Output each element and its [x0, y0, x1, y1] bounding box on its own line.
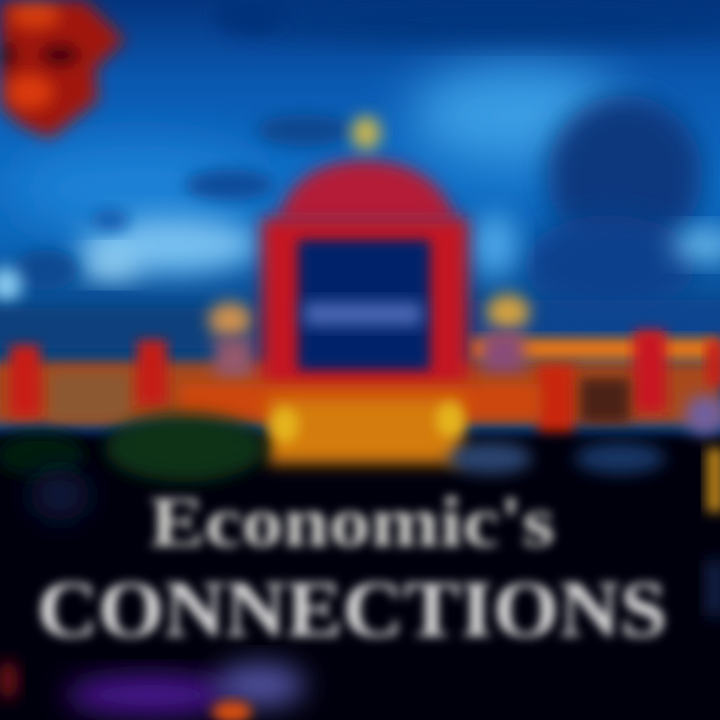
trees and foreground — [0, 395, 720, 616]
blue screen — [298, 240, 430, 370]
icon: golden finial — [351, 116, 381, 150]
dome — [278, 160, 456, 222]
sky background — [0, 0, 720, 400]
golden plinth — [180, 384, 540, 464]
central tower — [262, 116, 468, 386]
lower dark ground — [0, 432, 720, 720]
icon: red flower top left — [0, 0, 125, 138]
title line 1: Economic's — [150, 482, 554, 562]
clouds — [0, 0, 720, 348]
title line 2: CONNECTIONS — [37, 566, 667, 654]
tower frame — [262, 218, 468, 386]
building wings and colonnade — [0, 294, 720, 447]
bottom colour accents — [0, 660, 305, 720]
title — [37, 482, 667, 654]
